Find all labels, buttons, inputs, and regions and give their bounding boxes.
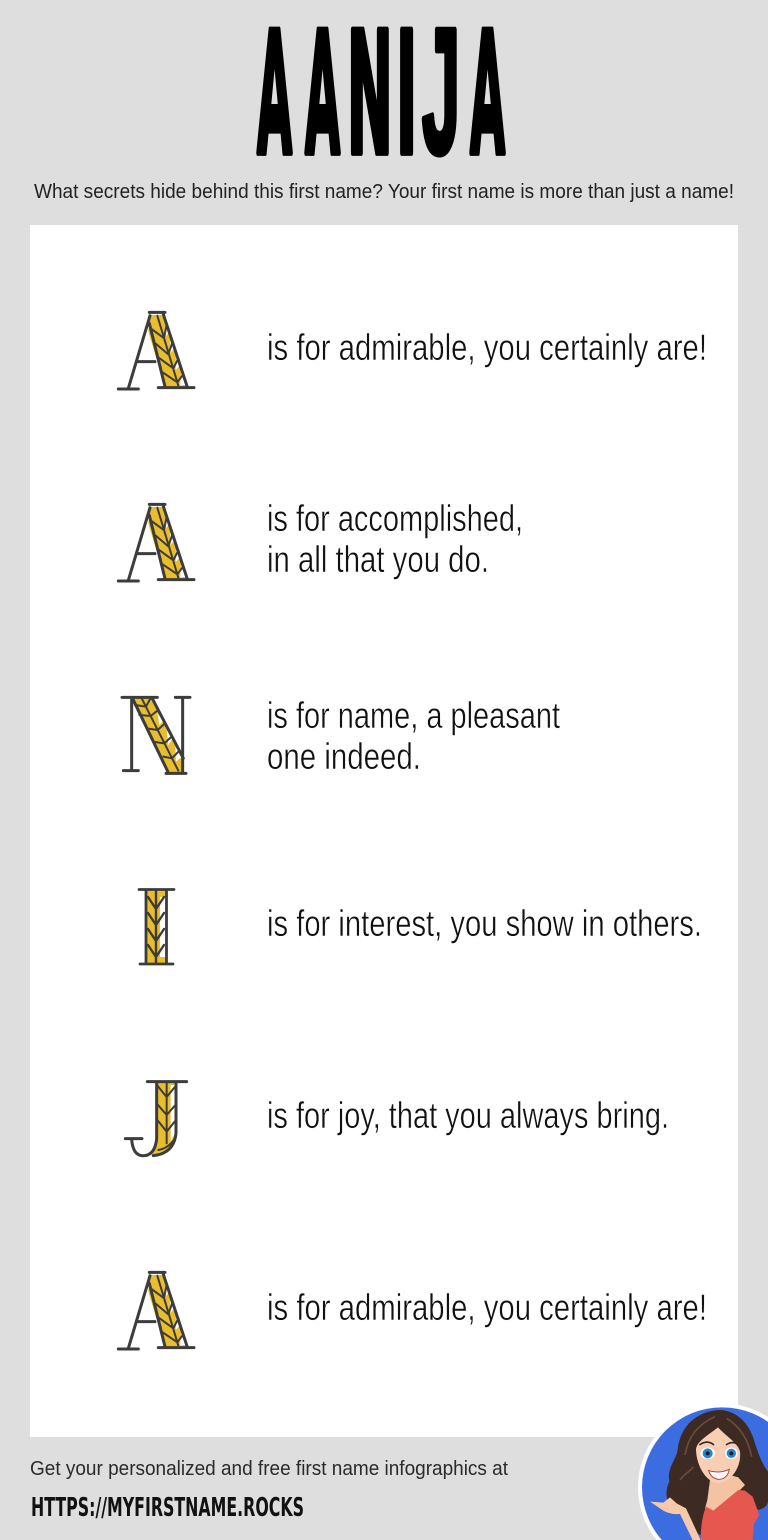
footer url: HTTPS://MYFIRSTNAME.ROCKS: [31, 1493, 304, 1523]
text lines: in all that you do.: [267, 539, 489, 580]
row 2: A: [118, 498, 523, 581]
row 4: I: [139, 890, 702, 964]
icon: wheat letter N: [122, 697, 190, 773]
icon: avatar woman: [638, 1403, 768, 1540]
row 3: N: [122, 695, 561, 777]
text lines: is for accomplished,: [267, 498, 523, 539]
title: A: [470, 0, 505, 193]
title: [257, 0, 505, 193]
row 1: A: [118, 312, 707, 389]
title: A: [305, 0, 340, 193]
panel: letters card: [30, 225, 738, 1437]
hair highlights: [680, 1417, 752, 1480]
text lines: [267, 695, 561, 777]
text lines: [267, 498, 523, 580]
icon: wheat letter A: [118, 1272, 194, 1349]
neck and chest: [705, 1475, 745, 1513]
face: [696, 1427, 740, 1483]
shirt: [701, 1490, 759, 1540]
row 6: A: [118, 1272, 707, 1349]
icon: wheat letter J: [125, 1082, 187, 1156]
text lines: is for name, a pleasant: [267, 695, 561, 736]
icon: wheat letter I: [139, 890, 174, 964]
smile: [709, 1469, 729, 1479]
arm and hand: [650, 1497, 701, 1540]
title: I: [396, 0, 417, 193]
title: N: [347, 0, 393, 193]
eye right: [725, 1448, 738, 1459]
brows: [699, 1442, 737, 1445]
icon: wheat letter A: [118, 504, 194, 581]
subtitle: What secrets hide behind this first name? Your first name is more than just a name!: [34, 181, 734, 203]
eye left: [700, 1448, 715, 1459]
hair: [666, 1410, 768, 1535]
title: A: [257, 0, 292, 193]
row 5: J: [125, 1082, 669, 1156]
footer text: Get your personalized and free first name infographics at: [30, 1458, 508, 1480]
text lines: one indeed.: [267, 736, 421, 777]
icon: wheat letter A: [118, 312, 194, 389]
text line: is for joy, that you always bring.: [267, 1095, 669, 1136]
